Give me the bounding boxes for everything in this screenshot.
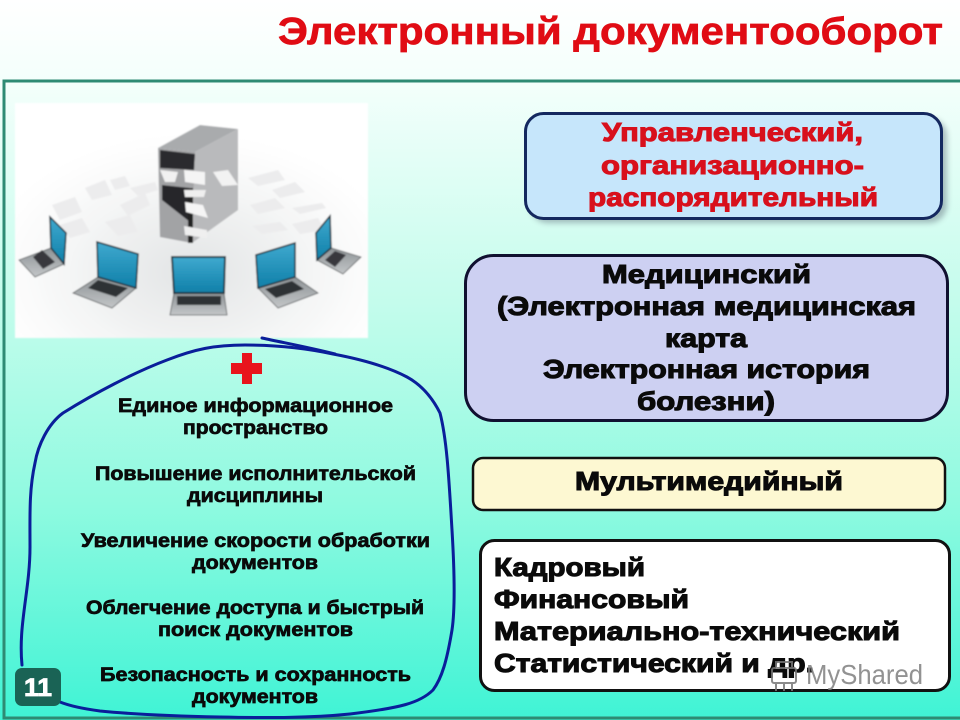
benefits list: документов (192, 553, 318, 574)
laptop left (73, 242, 138, 308)
box: other types: Материально-технический (494, 616, 900, 646)
image: server with documents and laptops (15, 103, 368, 338)
benefits list: документов (192, 687, 318, 708)
benefits list: Единое информационное (118, 396, 393, 417)
benefits list: поиск документов (158, 620, 353, 641)
benefits list (81, 396, 430, 708)
box: other types: Финансовый (494, 584, 689, 614)
benefits list: Повышение исполнительской (95, 464, 416, 485)
benefits list: Облегчение доступа и быстрый (86, 598, 424, 619)
benefits list: Увеличение скорости обработки (81, 531, 430, 552)
box: multimedia: Мультимедийный (575, 466, 843, 496)
hand-drawn outline around benefits (21, 338, 454, 718)
box: multimedia (473, 458, 945, 510)
box: medical: (Электронная медицинская (497, 291, 916, 321)
slide number badge: 11 (24, 674, 52, 702)
box: other types: Статистический и др. (494, 648, 814, 678)
box: medical: карта (665, 323, 748, 353)
title: Электронный документооборот (278, 11, 943, 53)
server tower (158, 125, 238, 243)
laptop far left (19, 217, 66, 277)
benefits list: пространство (183, 418, 328, 439)
laptop center (170, 257, 227, 315)
benefits list: дисциплины (187, 486, 323, 507)
box: other types (480, 540, 950, 690)
laptop right (256, 243, 318, 308)
paper sheets (52, 170, 326, 238)
box: managerial: организационно- (601, 150, 864, 180)
box: managerial: Управленческий, (602, 117, 863, 147)
laptop far right (316, 216, 361, 274)
box: managerial: распорядительный (588, 182, 878, 212)
watermark: MyShared (806, 659, 923, 690)
slide number badge (15, 668, 61, 706)
box: medical: Электронная история (543, 354, 870, 384)
box: medical (466, 256, 948, 420)
box: medical: Медицинский (602, 259, 811, 289)
box: managerial (526, 114, 947, 223)
icon: red cross (231, 353, 262, 384)
benefits list: Безопасность и сохранность (100, 665, 411, 686)
box: other types: Кадровый (494, 552, 645, 582)
box: medical: болезни) (637, 386, 775, 416)
